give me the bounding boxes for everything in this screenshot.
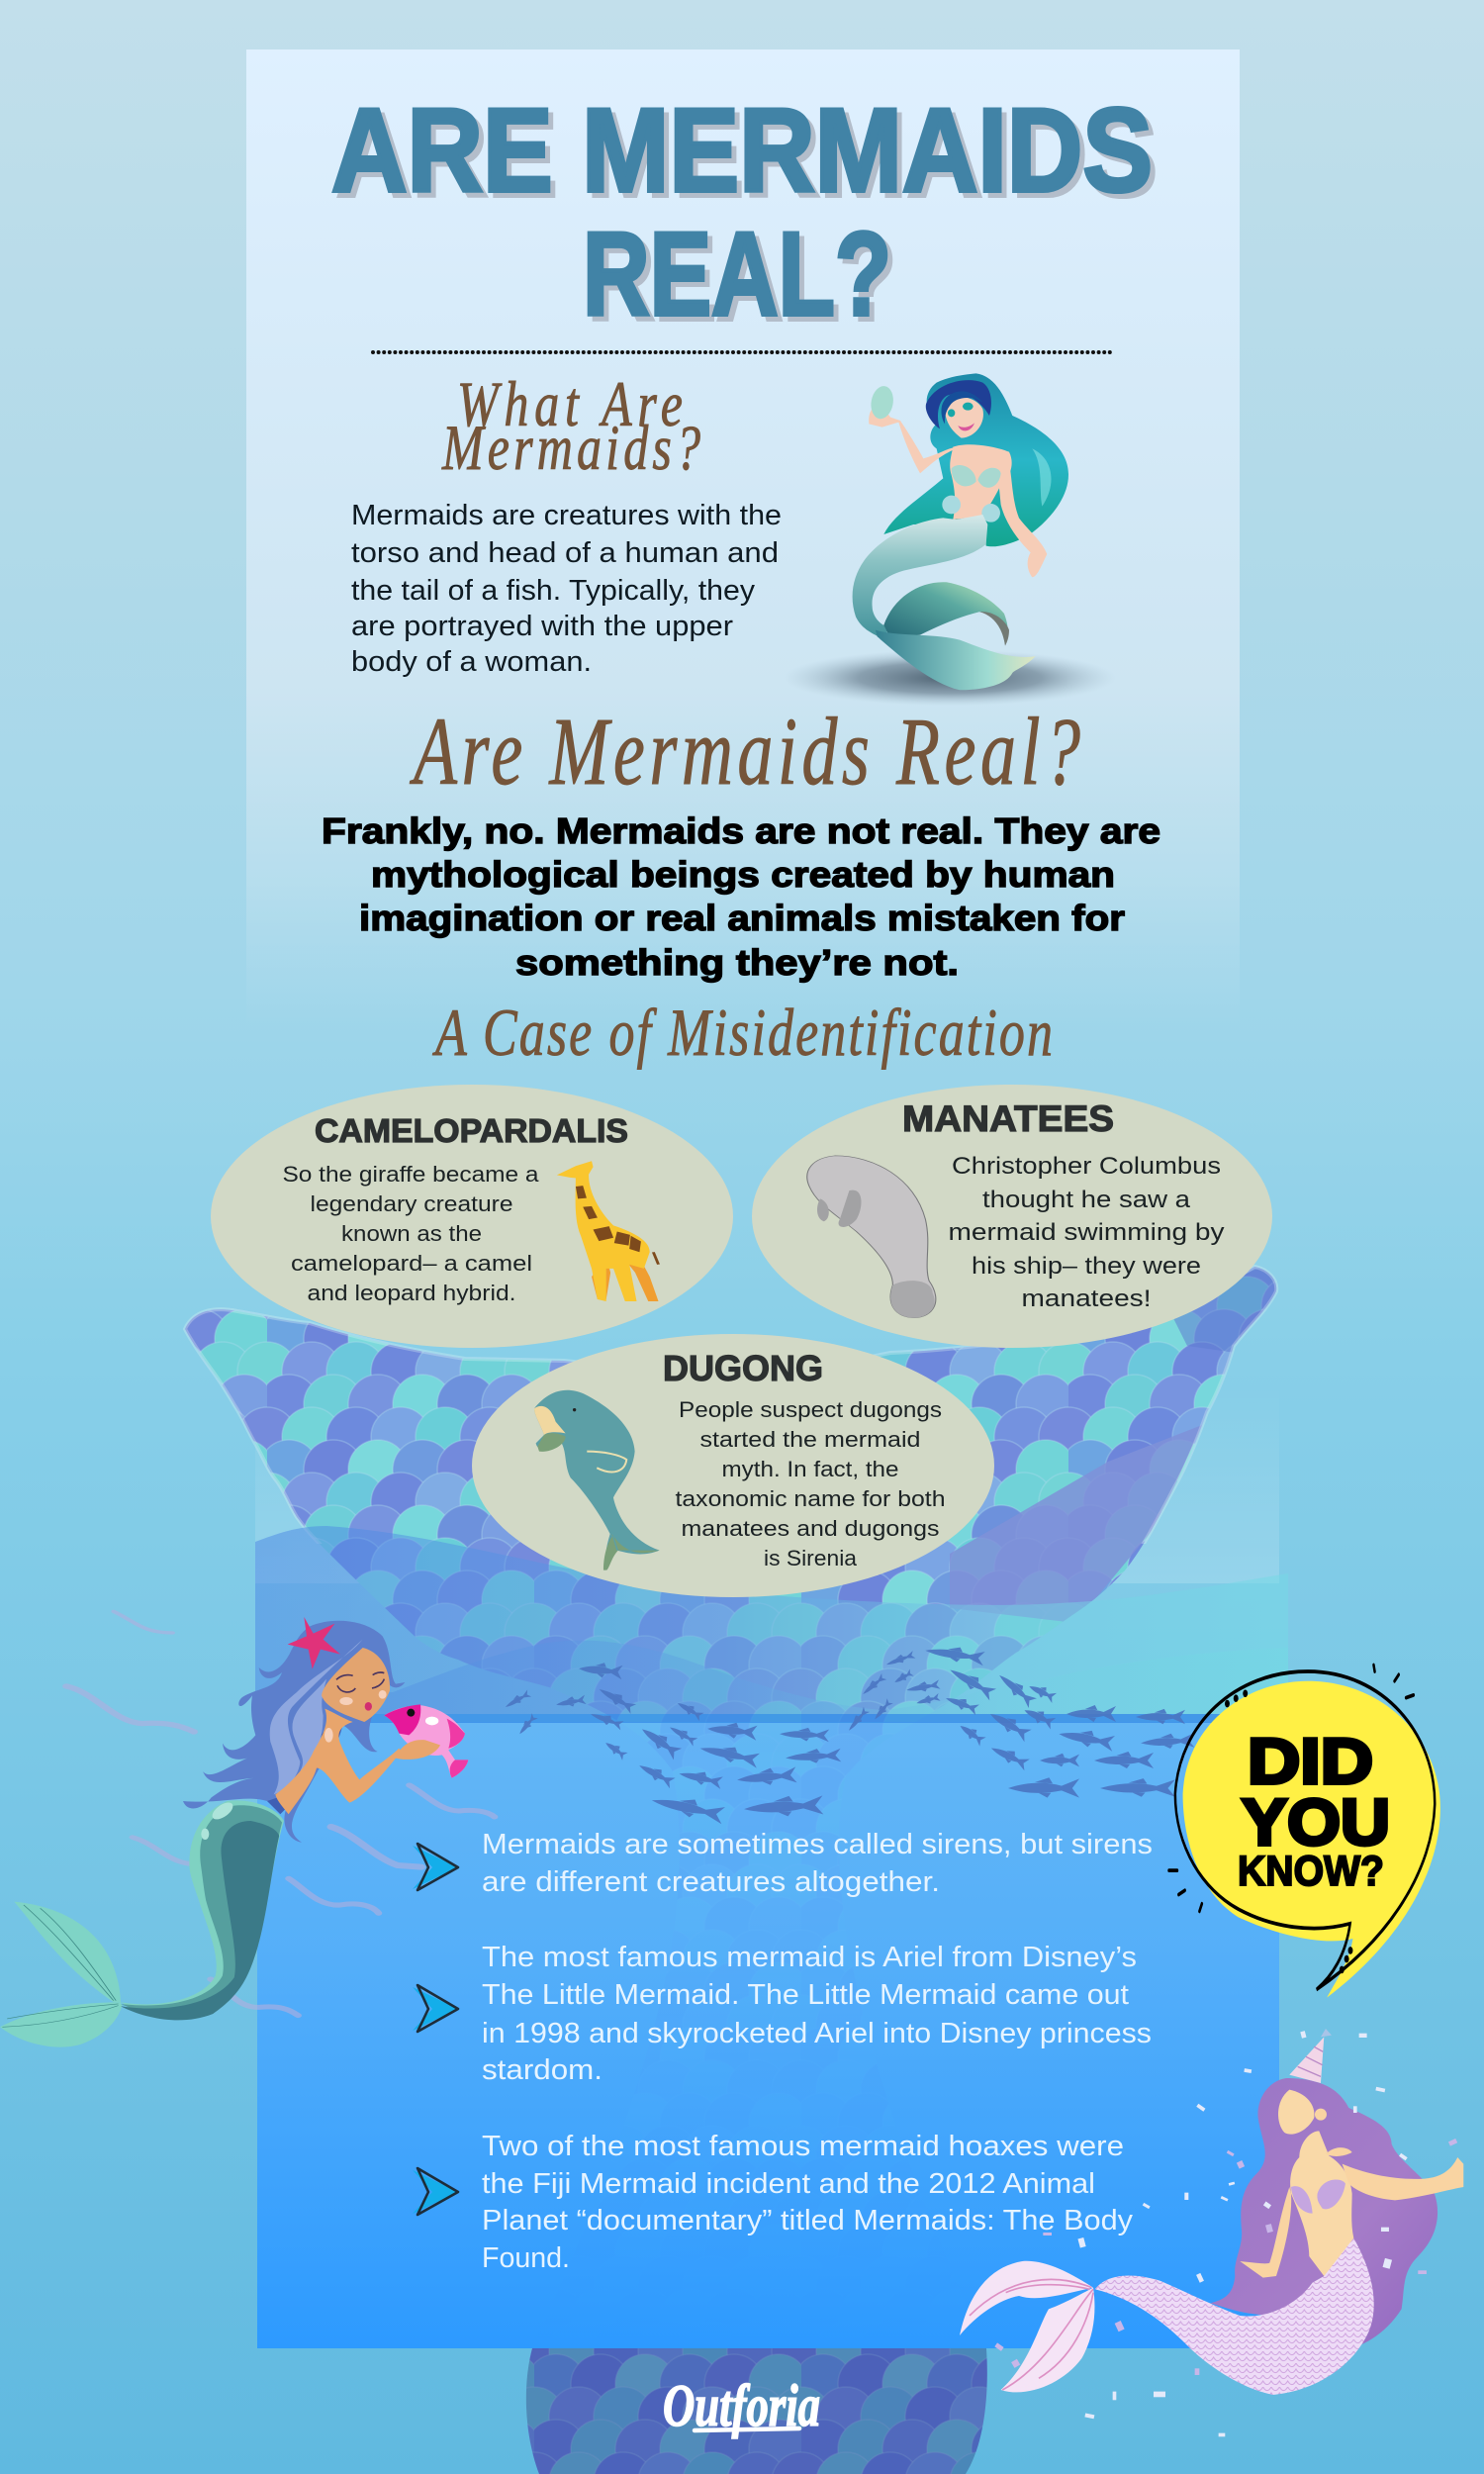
logo: Outforia: Outforia (663, 2373, 820, 2438)
text: Frankly, no: Frankly, no. Mermaids are not real. They are (322, 810, 1160, 851)
text: fact 1: are different creatures altogether. (482, 1866, 940, 1898)
text: fact 2 (482, 1942, 1152, 2086)
bubble: camelopardalis: CAMELOPARDALIS (315, 1112, 628, 1149)
bubble: dugong: People suspect dugongs (679, 1397, 942, 1422)
icon: manatee (807, 1156, 936, 1318)
callout: did you know: DID (1248, 1725, 1373, 1797)
icon: mermaid kissing a fish (0, 1611, 495, 2047)
bubble: camelopardalis: known as the (341, 1221, 482, 1246)
bubble: manatees: manatees! (1021, 1285, 1152, 1312)
bubble: manatees: Christopher Columbus (952, 1153, 1221, 1180)
callout: did you know: YOU (1242, 1785, 1390, 1858)
bubble: dugong: is Sirenia (764, 1546, 858, 1570)
text: Frankly, no: imagination or real animals mistaken for (359, 898, 1125, 938)
text: fact 3: Found. (482, 2242, 570, 2274)
bubble: camelopardalis: and leopard hybrid. (307, 1281, 516, 1305)
heading: What Are Mermaids?: What Are (457, 368, 683, 440)
text: fact 1 (482, 1829, 1153, 1898)
bubble: camelopardalis: So the giraffe became a (283, 1162, 539, 1187)
heading: What Are Mermaids? (441, 368, 700, 484)
text: mermaid definition: torso and head of a human and (351, 537, 779, 569)
text: fact 2: stardom. (482, 2054, 603, 2086)
bubble: manatees (752, 1085, 1272, 1348)
icon: teal mermaid holding shell (784, 373, 1116, 706)
bubble: dugong (472, 1334, 994, 1597)
title (331, 84, 1158, 345)
text: mermaid definition: body of a woman. (351, 646, 592, 678)
confetti (994, 2031, 1457, 2436)
mermaid upper body (183, 1617, 468, 1843)
bubble: camelopardalis: legendary creature (311, 1191, 512, 1216)
ribbons (66, 1611, 495, 2016)
icon: giraffe (557, 1161, 659, 1301)
dotted divider (373, 350, 1113, 354)
band on top of panel (257, 1714, 1279, 1723)
icon: purple party mermaid (994, 2029, 1463, 2436)
text: mermaid definition: Mermaids are creatures with the (351, 500, 782, 531)
school of fish (504, 1643, 1194, 1824)
text: Frankly, no (322, 810, 1160, 983)
text: fact 3: the Fiji Mermaid incident and the 2012 Animal (482, 2168, 1095, 2200)
heading: What Are Mermaids?: Mermaids? (441, 412, 700, 484)
list arrow 3 (413, 2168, 458, 2215)
bubble: camelopardalis (211, 1085, 733, 1348)
list arrow 2 (413, 1985, 458, 2032)
mermaid tail and fluke (0, 1800, 284, 2047)
list arrow 1 (413, 1844, 458, 1890)
text: mermaid definition (351, 500, 782, 678)
title: ARE MERMAIDS (331, 84, 1153, 217)
sequin mermaid tail backdrop (178, 1257, 1296, 2474)
callout: did you know: KNOW? (1238, 1848, 1384, 1895)
text: mermaid definition: the tail of a fish. Typically, they (351, 575, 756, 607)
icon: dugong (534, 1390, 660, 1570)
text: fact 3: Two of the most famous mermaid hoaxes were (482, 2131, 1124, 2162)
bubble: dugong: myth. In fact, the (722, 1457, 898, 1481)
bubble: manatees: his ship– they were (972, 1253, 1201, 1280)
heading: Are Mermaids Real?: Are Mermaids Real? (410, 699, 1080, 806)
bubble: dugong: started the mermaid (700, 1427, 920, 1452)
faint light wash (255, 1385, 1279, 1583)
fluke of purple mermaid (960, 2261, 1094, 2392)
text: fact 2: in 1998 and skyrocketed Ariel into Disney princess (482, 2018, 1152, 2049)
bubble: dugong: taxonomic name for both (675, 1486, 946, 1511)
panel: top light card (246, 49, 1240, 1029)
bubble: dugong: DUGONG (663, 1348, 823, 1388)
text: Frankly, no: mythological beings created by human (371, 854, 1115, 895)
callout: did you know (1169, 1665, 1440, 1998)
text: fact 2: The most famous mermaid is Ariel from Disney’s (482, 1942, 1137, 1973)
wave bands behind text (255, 1526, 1288, 1714)
bubble: camelopardalis: camelopard– a camel (291, 1251, 532, 1276)
text: fact 2: The Little Mermaid. The Little Mermaid came out (482, 1979, 1129, 2011)
text: fact 1: Mermaids are sometimes called sirens, but sirens (482, 1829, 1153, 1860)
text: fact 3: Planet “documentary” titled Mermaids: The Body (482, 2205, 1134, 2236)
text: mermaid definition: are portrayed with the upper (351, 611, 733, 642)
text: fact 3 (482, 2131, 1134, 2274)
heading: A Case of Misidentification: A Case of Misidentification (432, 997, 1053, 1071)
bubble: manatees: MANATEES (902, 1098, 1114, 1139)
title: REAL? (588, 213, 896, 345)
title: REAL? (583, 208, 891, 340)
bubble: manatees: thought he saw a (982, 1187, 1190, 1213)
bubble: dugong: manatees and dugongs (681, 1516, 940, 1541)
bubble: manatees: mermaid swimming by (948, 1219, 1225, 1246)
panel: blue facts panel (257, 1722, 1279, 2348)
title: ARE MERMAIDS (336, 89, 1158, 222)
text: Frankly, no: something they’re not. (515, 942, 959, 983)
